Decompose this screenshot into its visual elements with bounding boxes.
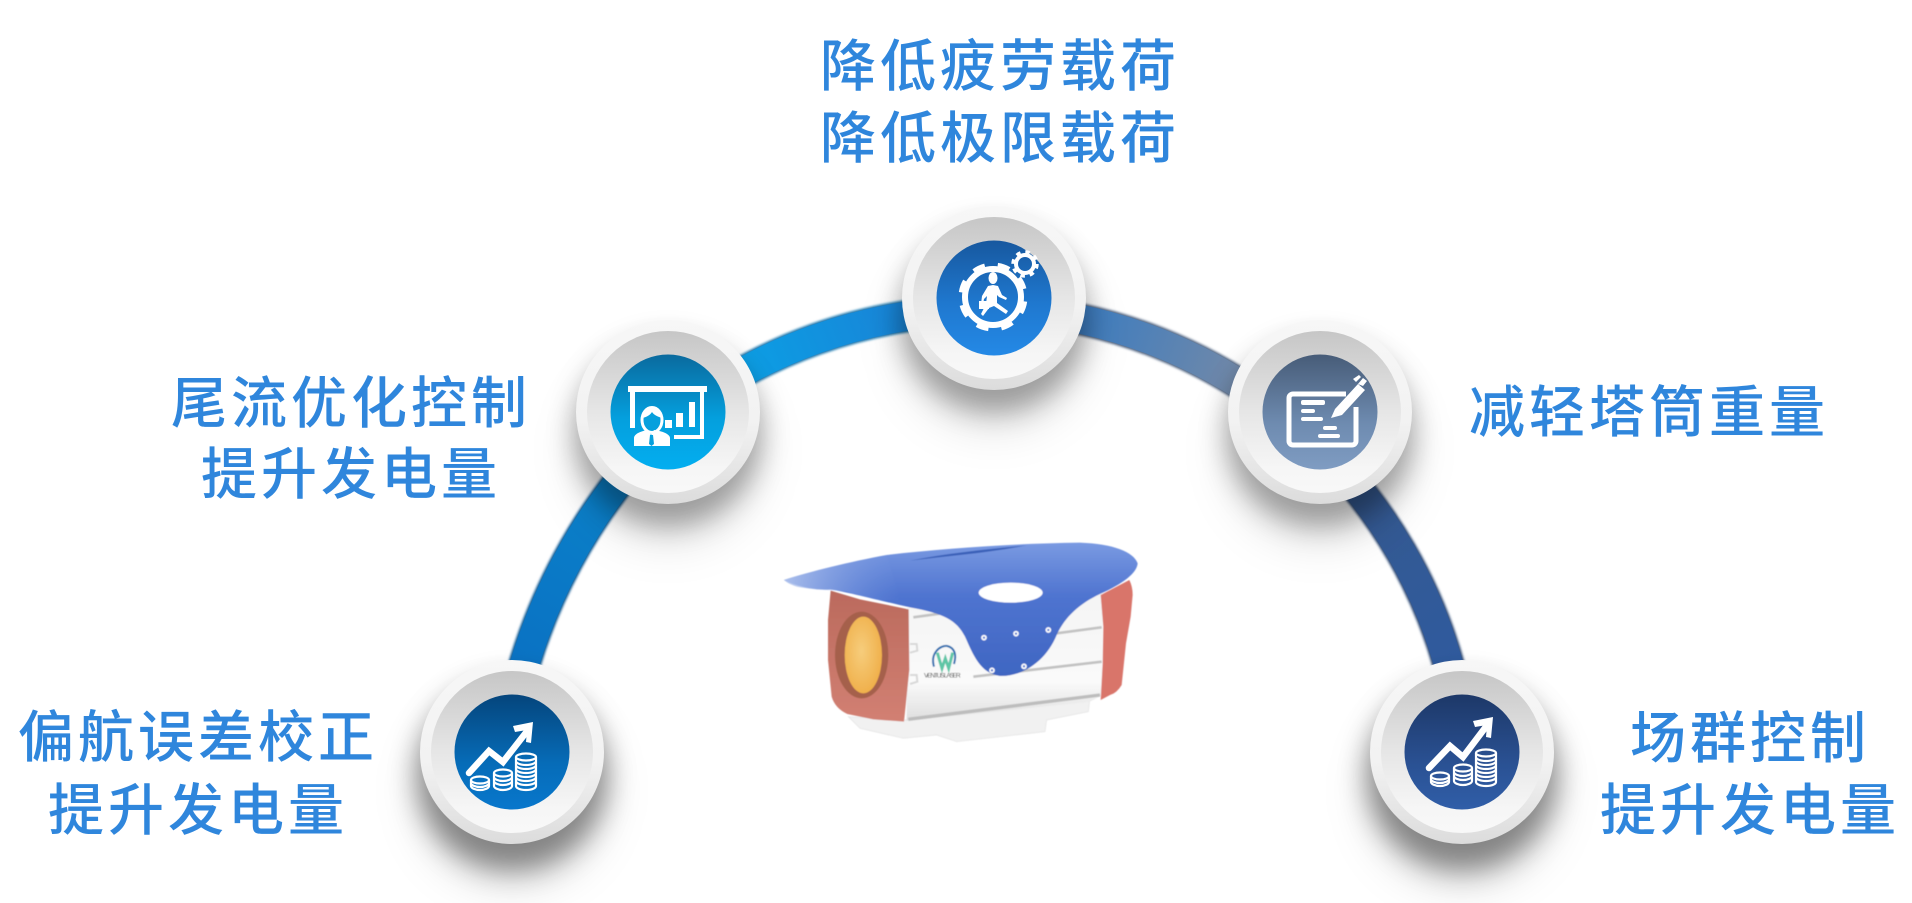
node: top, load reduction [900, 206, 1088, 428]
rear red cap [1101, 580, 1133, 700]
heading: lower right labels: 提升发电量 [1600, 779, 1900, 842]
mounting bracket [848, 698, 1090, 742]
heading: top labels [820, 35, 1180, 170]
icon: document with pen [1289, 375, 1367, 445]
icon: growth chart with coins [1429, 717, 1496, 786]
node: lower left, yaw error correction [416, 660, 608, 882]
heading: lower left labels: 提升发电量 [48, 779, 348, 842]
arc: lower right band [1301, 430, 1457, 700]
icon: running businessman in gear [957, 252, 1037, 333]
heading: top labels: 降低极限载荷 [820, 107, 1180, 170]
icon: growth chart with coins [469, 722, 536, 790]
lens [835, 612, 888, 698]
arc: upper right band [994, 309, 1301, 430]
arc: lower left band [515, 440, 655, 700]
heading: lower right labels [1600, 707, 1900, 842]
node: right, tower weight [1226, 320, 1414, 542]
heading: left upper labels [171, 372, 531, 506]
heading: top labels: 降低疲劳载荷 [820, 35, 1180, 98]
node: upper left, wake optimisation [574, 320, 762, 542]
front red face [828, 591, 909, 722]
heading: lower right labels: 场群控制 [1630, 707, 1870, 770]
heading: lower left labels: 偏航误差校正 [18, 706, 378, 769]
aluminium body [907, 592, 1103, 721]
hood screws [982, 628, 1050, 672]
heading: left upper labels: 尾流优化控制 [171, 372, 531, 435]
heading: left upper labels: 提升发电量 [201, 443, 501, 506]
node: lower right, farm control [1366, 660, 1558, 882]
logo [924, 646, 961, 680]
heading: lower left labels [18, 706, 378, 842]
hood [784, 543, 1138, 676]
arc: upper left band [660, 311, 994, 430]
heading: right label: 减轻塔筒重量 [1469, 381, 1829, 444]
logo: VENTUS LASER [924, 673, 961, 680]
device: lidar unit [784, 543, 1138, 742]
icon: presenter with board [628, 386, 707, 446]
